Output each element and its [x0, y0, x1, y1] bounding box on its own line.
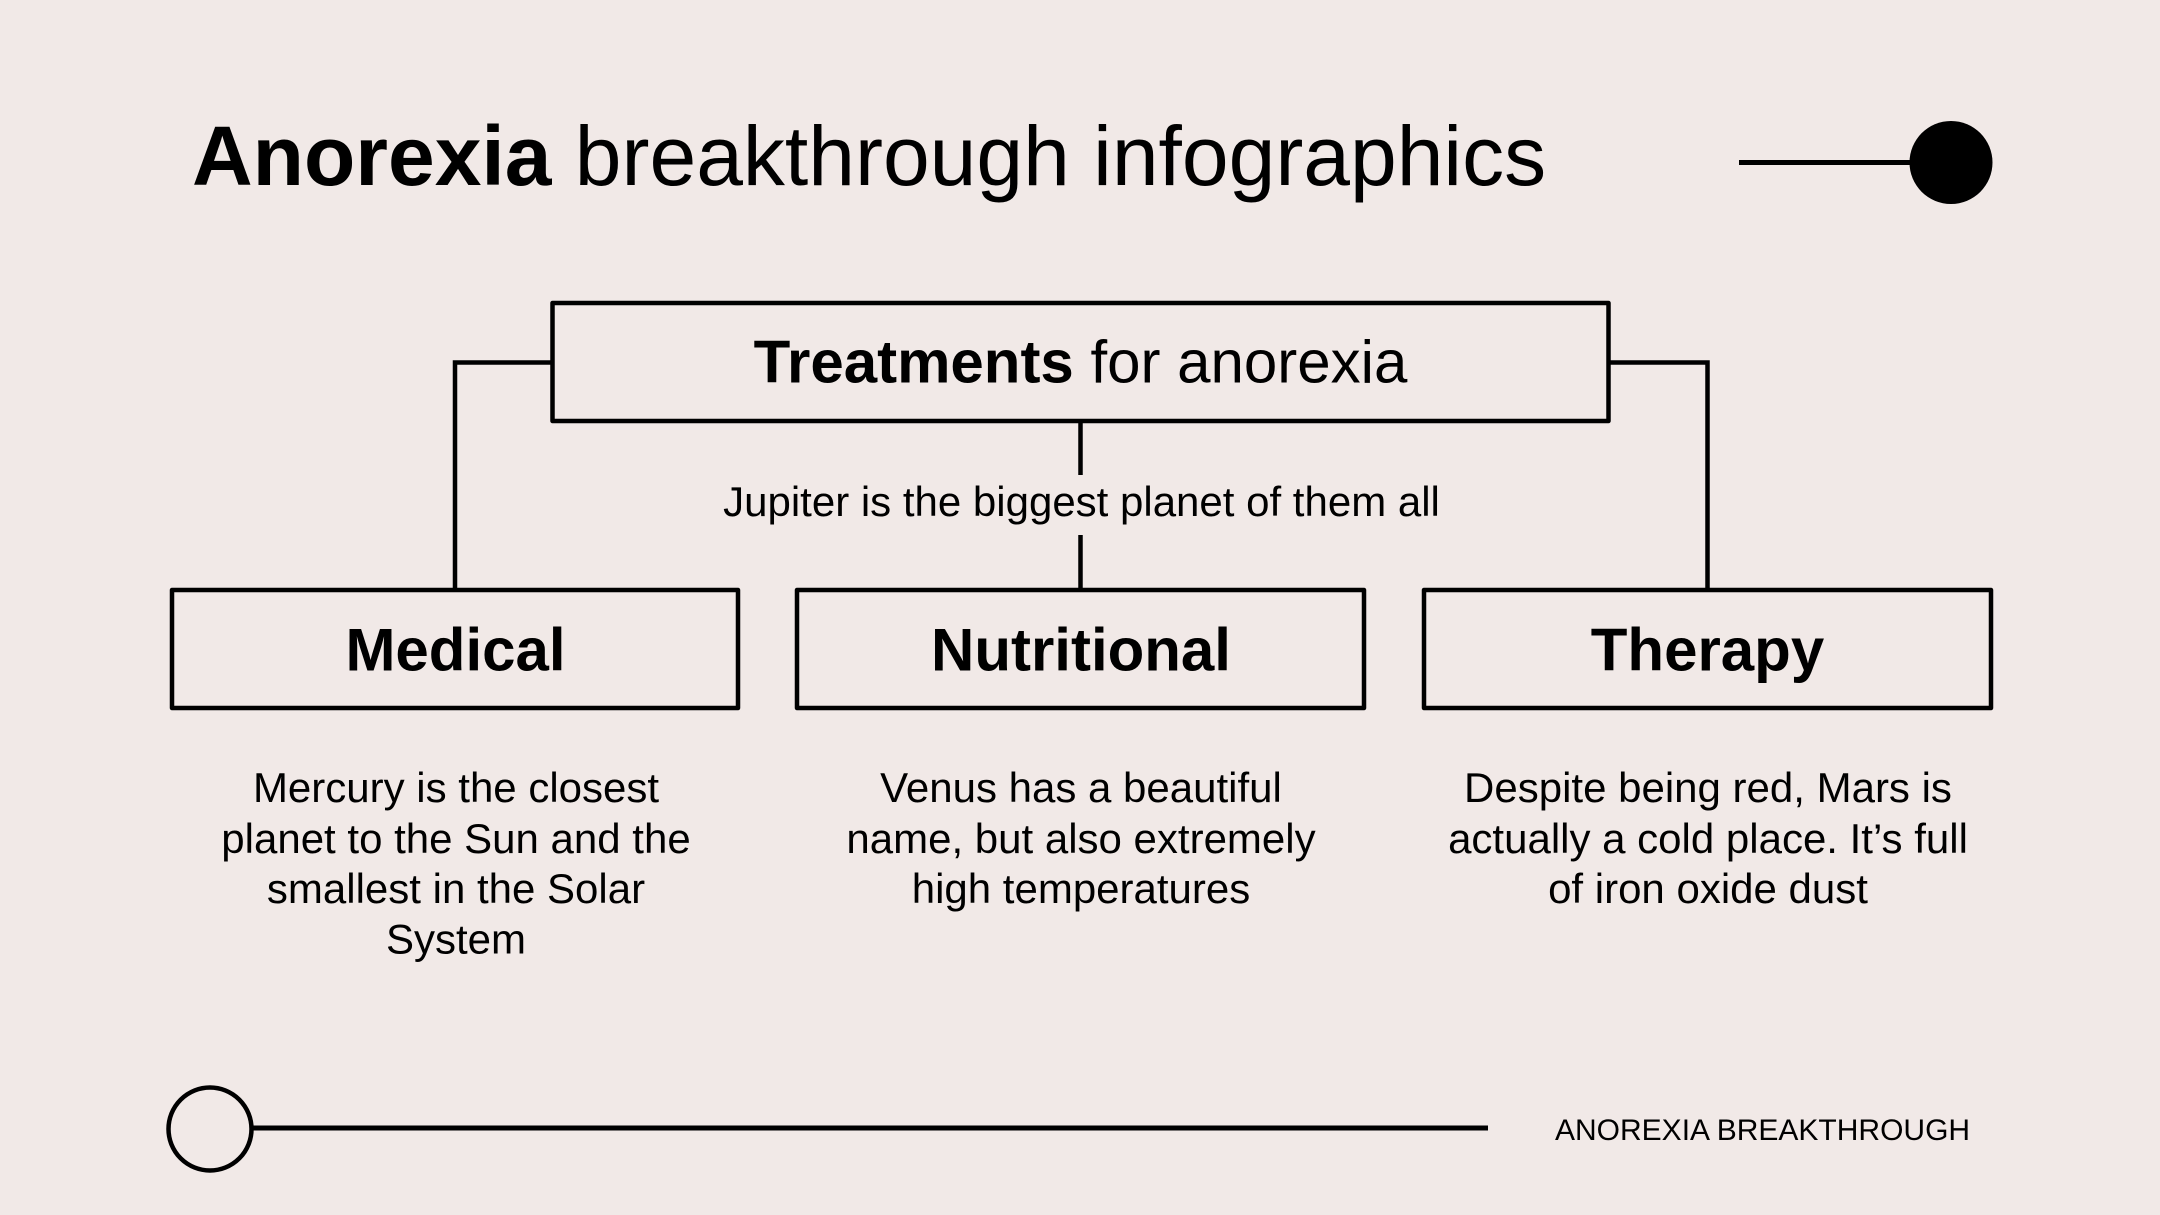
text: Nutritional description: name, but also extremely — [846, 815, 1316, 862]
text: Nutritional description — [846, 764, 1316, 912]
text: Medical description: Mercury is the closest — [253, 764, 659, 811]
connector: center bottom — [1078, 535, 1083, 590]
panel: treatments heading — [552, 303, 1608, 421]
title: Anorexia breakthrough infographics — [192, 109, 1546, 203]
panel: Therapy — [1424, 590, 1991, 708]
panel: Therapy: Therapy — [1591, 616, 1825, 684]
icon: outlined circle with line — [168, 1088, 1488, 1170]
panel: treatments heading: Treatments for anorexia — [754, 328, 1408, 396]
connector: right branch — [1609, 362, 1708, 590]
text: Nutritional description: Venus has a beautiful — [880, 764, 1282, 811]
text: Therapy description: of iron oxide dust — [1548, 865, 1868, 912]
panel: Nutritional: Nutritional — [931, 616, 1231, 684]
connector: center top — [1078, 421, 1083, 475]
connector: left branch — [455, 362, 552, 590]
panel: Nutritional — [797, 590, 1364, 708]
text: Medical description: smallest in the Solar — [267, 865, 645, 912]
icon: filled circle with line — [1739, 121, 1992, 204]
panel: Medical — [172, 590, 738, 708]
text: Medical description: planet to the Sun and the — [221, 815, 691, 862]
text: Nutritional description: high temperatures — [912, 865, 1250, 912]
text: Therapy description — [1448, 764, 1968, 912]
text: Medical description: System — [386, 916, 526, 962]
panel: Medical: Medical — [345, 616, 566, 684]
text: Therapy description: actually a cold place. It’s full — [1448, 815, 1968, 862]
text: Jupiter subtitle: Jupiter is the biggest planet of them all — [723, 478, 1440, 525]
text: Medical description — [221, 764, 691, 962]
text: Therapy description: Despite being red, Mars is — [1464, 764, 1952, 811]
footer label: ANOREXIA BREAKTHROUGH — [1555, 1114, 1970, 1147]
